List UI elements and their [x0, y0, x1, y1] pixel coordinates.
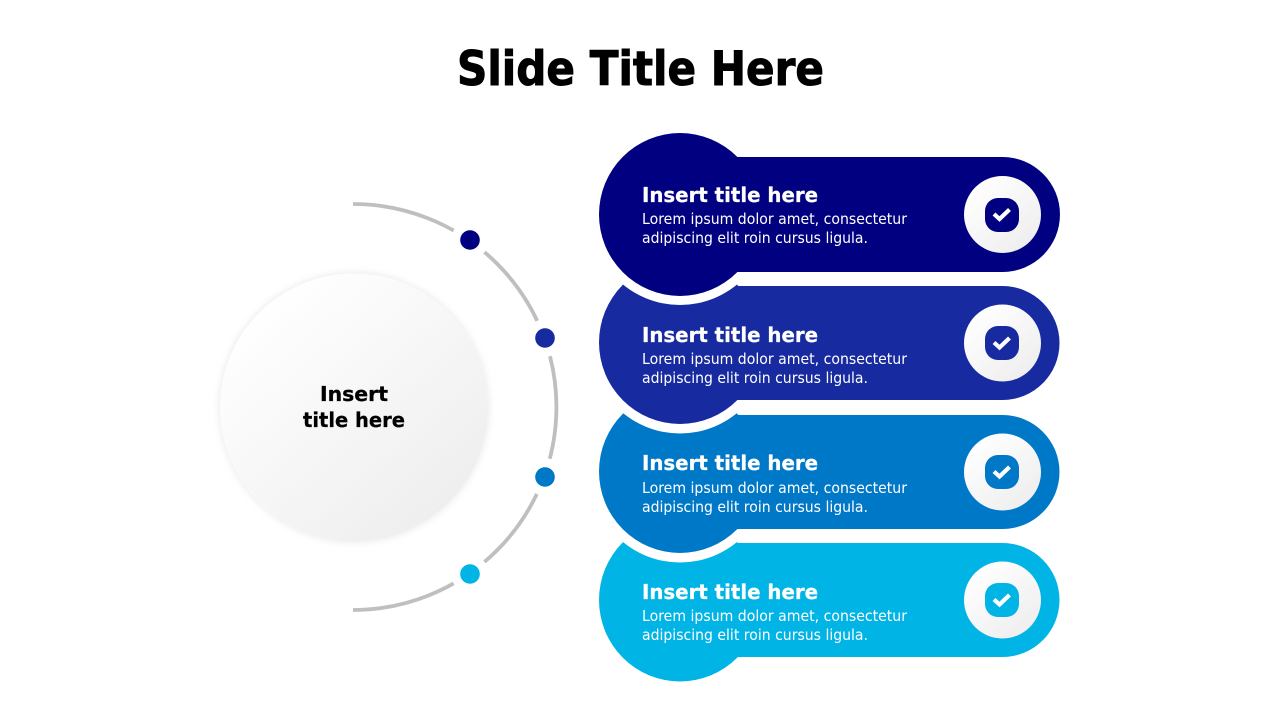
card 2 check icon	[964, 304, 1041, 382]
card 3 heading: Insert title here	[642, 451, 818, 475]
title: Slide Title Here	[457, 42, 824, 97]
card 3 check icon	[964, 434, 1041, 510]
dot 4	[460, 564, 480, 584]
card 3 body: adipiscing elit roin cursus ligula.	[642, 498, 868, 516]
card 4 body: Lorem ipsum dolor amet, consectetur	[642, 607, 908, 625]
dot 3	[535, 467, 555, 487]
card 2 body: adipiscing elit roin cursus ligula.	[642, 369, 868, 387]
card 1 body: adipiscing elit roin cursus ligula.	[642, 229, 868, 247]
card 2	[599, 261, 1060, 424]
card 1 body: Lorem ipsum dolor amet, consectetur	[642, 210, 908, 228]
card 4 body: adipiscing elit roin cursus ligula.	[642, 626, 868, 644]
center circle label: Insert	[320, 382, 388, 406]
card 3	[599, 390, 1060, 553]
card 4 heading: Insert title here	[642, 580, 818, 604]
card 4	[599, 518, 1060, 682]
card 1 check icon	[964, 176, 1041, 253]
center circle	[220, 274, 488, 542]
center circle label: title here	[303, 408, 405, 432]
card 3 body: Lorem ipsum dolor amet, consectetur	[642, 479, 908, 497]
card 4 check icon	[964, 562, 1041, 638]
card 1	[599, 133, 1060, 296]
arc with four step dots	[353, 204, 564, 610]
dot 1	[460, 230, 480, 250]
card 2 body: Lorem ipsum dolor amet, consectetur	[642, 350, 908, 368]
card 1 heading: Insert title here	[642, 183, 818, 207]
card 2 heading: Insert title here	[642, 323, 818, 347]
dot 2	[535, 328, 555, 348]
